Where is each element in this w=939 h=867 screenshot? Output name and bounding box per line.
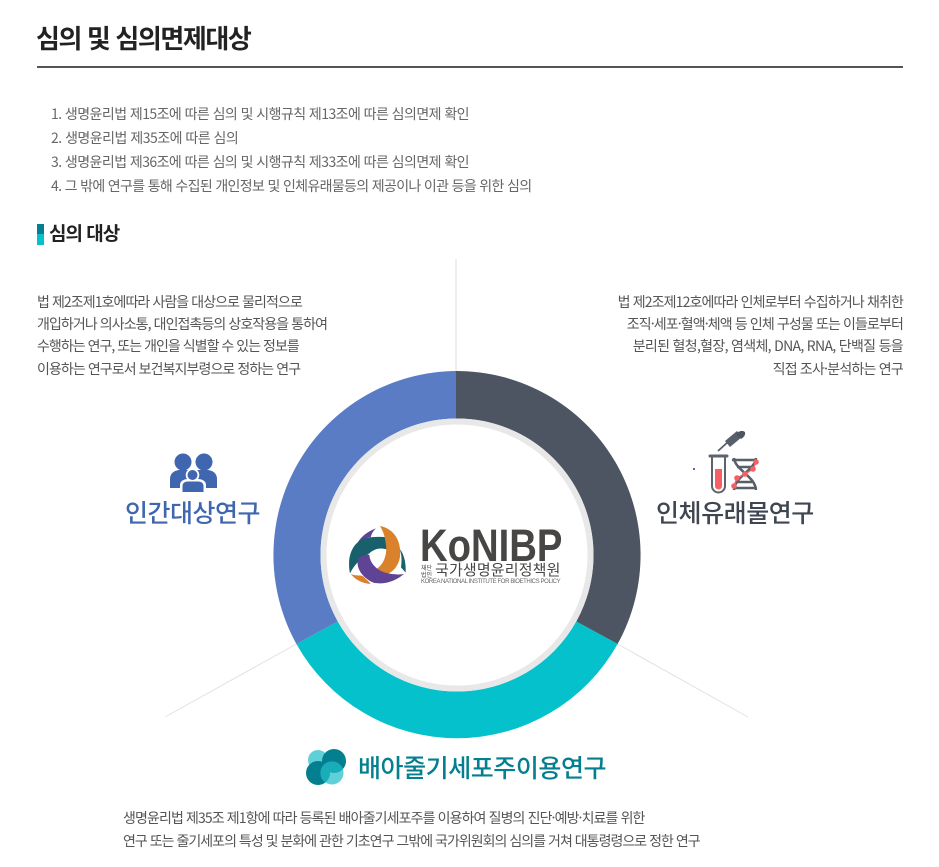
right description: 법 제2조제12호에따라 인체로부터 수집하거나 채취한 [618, 292, 903, 312]
title rule [37, 66, 903, 68]
logo english name: KOREA NATIONAL INSTITUTE FOR BIOETHICS POLICY [421, 579, 560, 585]
label: human derivatives research: 인체유래물연구 [656, 494, 814, 530]
label: human research: 인간대상연구 [125, 494, 260, 530]
numbered list [51, 104, 531, 196]
logo [349, 520, 562, 585]
bottom description: 생명윤리법 제35조 제1항에 따라 등록된 배아줄기세포주를 이용하여 질병의 진단·예방·치료를 위한 [123, 808, 645, 828]
numbered list: 2. 생명윤리법 제35조에 따른 심의 [51, 128, 238, 148]
left description [37, 292, 327, 379]
icon: stem cells [306, 749, 346, 785]
title: 심의 및 심의면제대상 [36, 19, 250, 56]
right description: 직접 조사·분석하는 연구 [773, 359, 903, 379]
numbered list: 3. 생명윤리법 제36조에 따른 심의 및 시행규칙 제33조에 따른 심의면제 확인 [51, 152, 469, 172]
right description: 조직·세포·혈액·체액 등 인체 구성물 또는 이들로부터 [627, 314, 903, 334]
left description: 개입하거나 의사소통, 대인접촉등의 상호작용을 통하여 [37, 314, 327, 334]
logo wordmark: KoNIBP [420, 520, 562, 571]
section heading: 심의 대상 [49, 219, 119, 246]
numbered list: 4. 그 밖에 연구를 통해 수집된 개인정보 및 인체유래물등의 제공이나 이관 등을 위한 심의 [51, 176, 531, 196]
bottom description: 연구 또는 줄기세포의 특성 및 분화에 관한 기초연구 그밖에 국가위원회의 심의를 거쳐 대통령령으로 정한 연구 [123, 831, 700, 851]
left description: 수행하는 연구, 또는 개인을 식별할 수 있는 정보를 [37, 336, 299, 356]
left description: 이용하는 연구로서 보건복지부령으로 정하는 연구 [37, 359, 300, 379]
logo foundation mark: 재단 [421, 563, 432, 572]
logo korean name: 국가생명윤리정책원 [435, 559, 561, 580]
bottom description [123, 808, 700, 851]
label: embryonic stem cell research: 배아줄기세포주이용연구 [358, 749, 606, 785]
left description: 법 제2조제1호에따라 사람을 대상으로 물리적으로 [37, 292, 302, 312]
icon: people [170, 454, 217, 492]
right description [618, 292, 904, 379]
logo foundation mark [421, 563, 432, 579]
numbered list: 1. 생명윤리법 제15조에 따른 심의 및 시행규칙 제13조에 따른 심의면제 확인 [51, 104, 469, 124]
right description: 분리된 혈청,혈장, 염색체, DNA, RNA, 단백질 등을 [633, 336, 903, 356]
icon: test tube and DNA [708, 430, 759, 494]
logo emblem [349, 526, 406, 584]
logo foundation mark: 법인 [421, 570, 432, 579]
decorative blue dot [693, 468, 695, 470]
